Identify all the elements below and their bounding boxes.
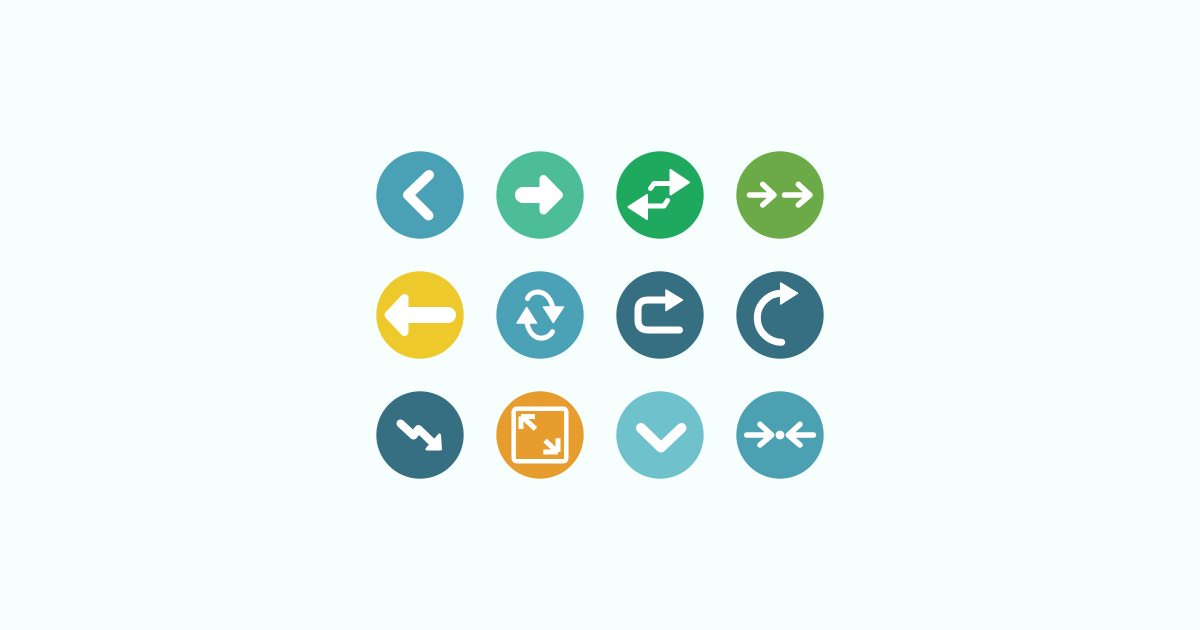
icon: curved redo arrow <box>736 271 824 359</box>
icon: return right arrow <box>616 271 704 359</box>
icon: double right arrows <box>736 151 824 239</box>
icon: trending down arrow <box>376 391 464 479</box>
icon: swap arrows <box>616 151 704 239</box>
icon: bold right arrow <box>496 151 584 239</box>
icon: long left arrow <box>376 271 464 359</box>
icon: down chevron <box>616 391 704 479</box>
icon: circular refresh arrows <box>496 271 584 359</box>
icon: left chevron <box>376 151 464 239</box>
icon: arrows pointing to centre dot <box>736 391 824 479</box>
icon: expand square <box>496 391 584 479</box>
